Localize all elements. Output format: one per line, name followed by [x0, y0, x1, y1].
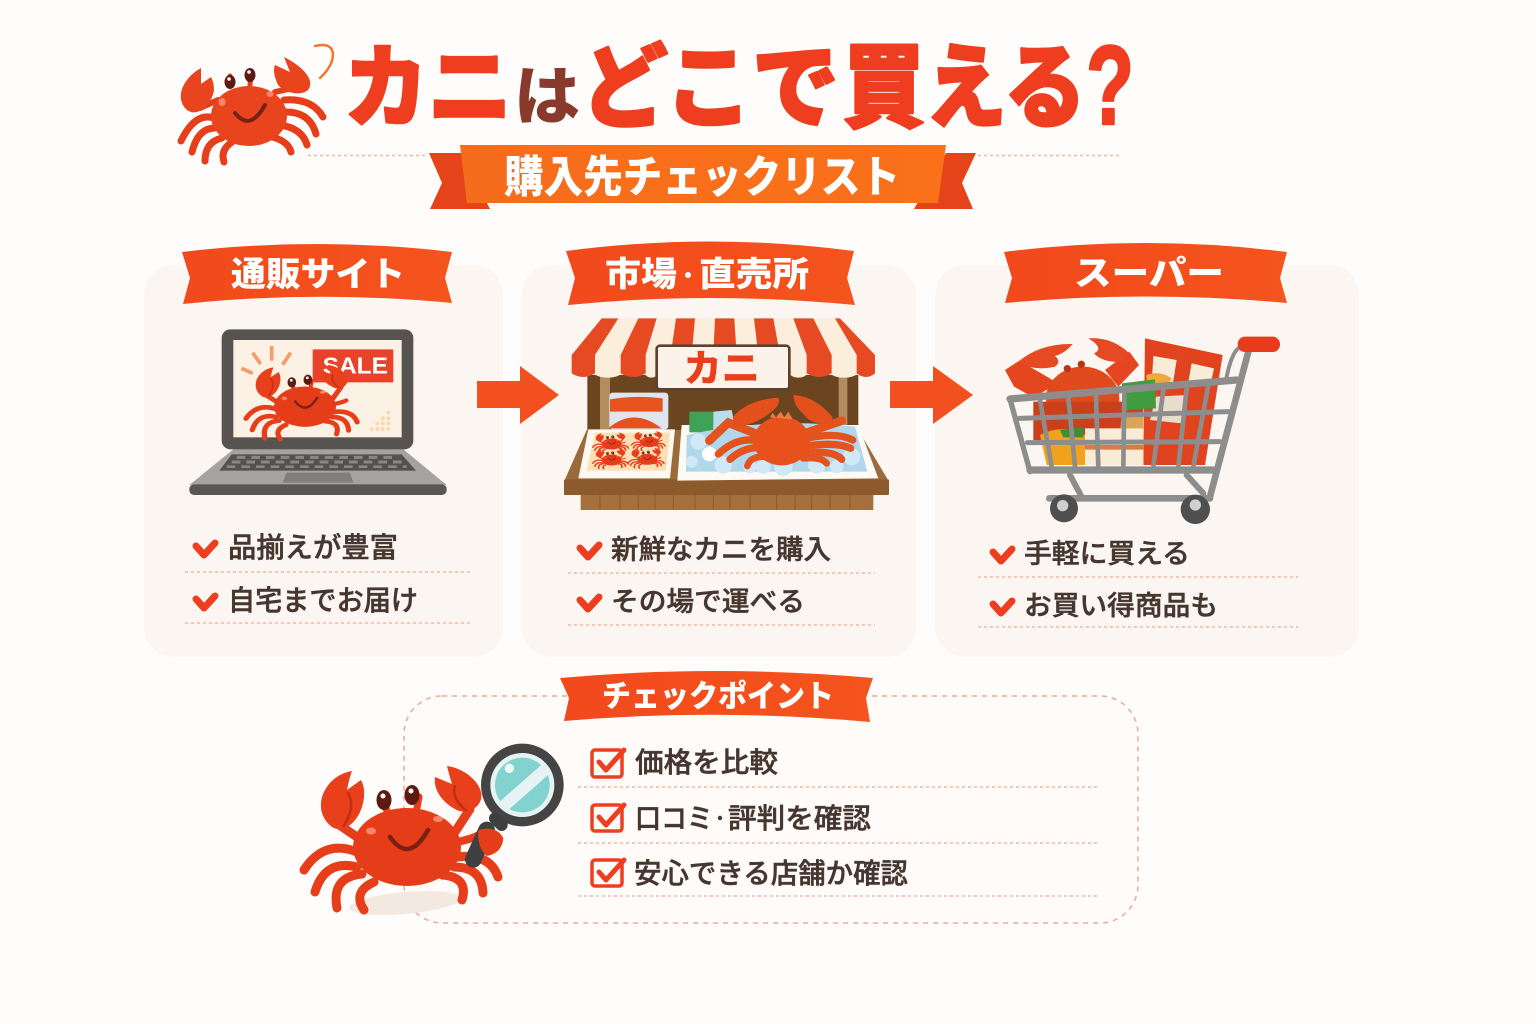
subtitle ribbon — [308, 145, 1120, 209]
icon: laptop with sale crab: SALE — [323, 352, 388, 378]
heading ribbon: market — [566, 242, 855, 305]
panel: supermarket — [935, 243, 1359, 657]
subtitle ribbon: 購入先チェックリスト — [504, 153, 900, 202]
check item: trusted shop — [578, 858, 1100, 896]
title: ? — [1086, 23, 1134, 148]
check item: reviews: 評判を確認 — [728, 803, 871, 834]
checklist: mail order — [185, 532, 473, 623]
title: カニ — [344, 39, 512, 139]
heading ribbon: mail order — [182, 244, 452, 304]
check item: trusted shop: 安心できる店舗か確認 — [634, 858, 908, 889]
checklist: supermarket: 手軽に買える — [1024, 539, 1190, 569]
icon: magnifying glass — [473, 748, 559, 859]
checklist: market: 新鮮なカニを購入 — [611, 535, 831, 565]
check item: price — [578, 747, 1100, 787]
heading ribbon: check points: チェックポイント — [602, 679, 834, 714]
icon: market stall — [564, 318, 889, 510]
icon: title crab — [181, 45, 333, 162]
heading ribbon: mail order: 通販サイト — [231, 256, 405, 294]
checklist: mail order: 品揃えが豊富 — [228, 532, 398, 563]
title: 買える — [843, 38, 1086, 140]
check item: price: 価格を比較 — [635, 747, 778, 778]
checklist: check points — [578, 747, 1100, 896]
checklist: supermarket: お買い得商品も — [1024, 591, 1218, 621]
icon: laptop with sale crab — [189, 329, 447, 495]
checklist: mail order: 自宅までお届け — [228, 585, 418, 616]
check item: reviews — [578, 803, 1100, 843]
icon: shopping cart — [1005, 337, 1280, 524]
heading ribbon: supermarket — [1004, 243, 1287, 303]
title — [344, 23, 1134, 148]
heading ribbon: supermarket: スーパー — [1074, 255, 1224, 293]
panel: check points — [404, 671, 1138, 923]
title: は — [514, 61, 580, 133]
heading ribbon: market: 市場 — [605, 256, 677, 294]
icon: crab with magnifying glass — [304, 748, 559, 919]
panel: market — [522, 242, 916, 657]
checklist: market — [568, 535, 875, 625]
heading ribbon: market: 直売所 — [699, 256, 809, 294]
arrow: market to supermarket — [890, 366, 973, 424]
checklist: market: その場で運べる — [611, 587, 805, 617]
icon: market stall: カニ — [683, 348, 760, 390]
panel: mail order — [144, 244, 503, 657]
checklist: supermarket — [978, 539, 1298, 627]
title: どこで — [581, 38, 839, 140]
heading ribbon: check points — [560, 671, 873, 722]
check item: reviews: 口コミ — [635, 803, 713, 834]
arrow: mail order to market — [477, 366, 559, 424]
